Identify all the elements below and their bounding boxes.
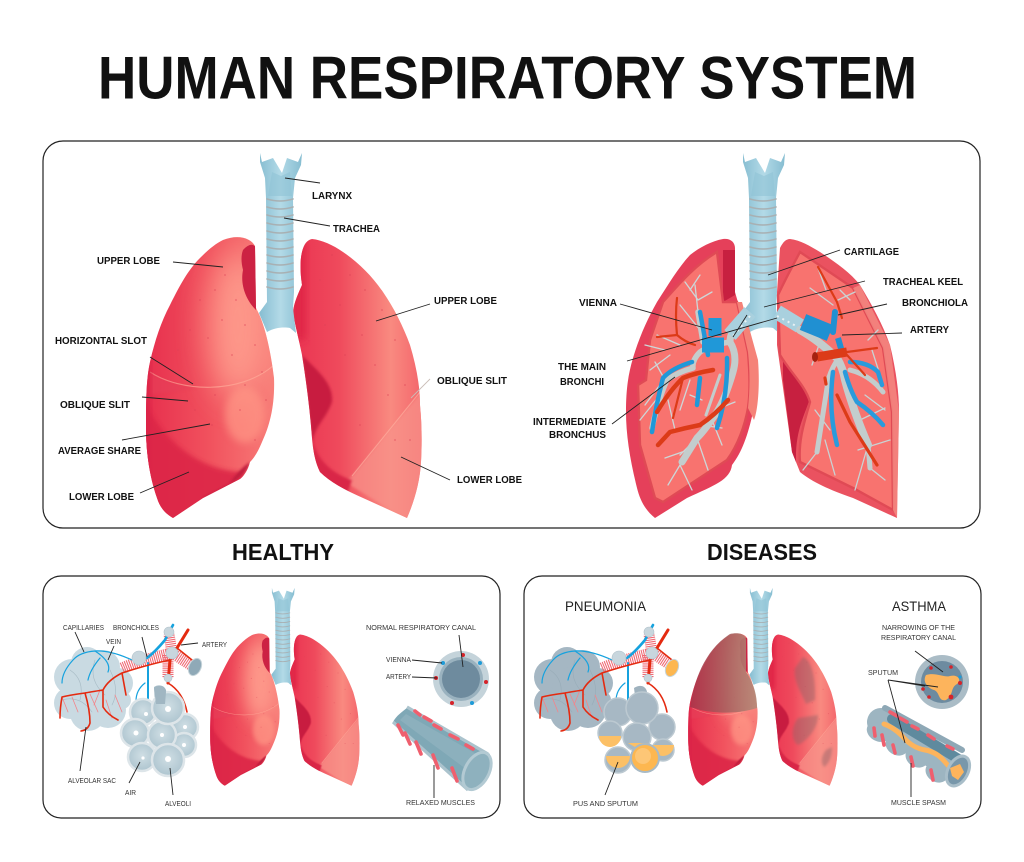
labels: diseases xyxy=(573,623,956,808)
labels: cross-section: INTERMEDIATE xyxy=(533,416,606,428)
labels: healthy: ARTERY xyxy=(386,672,411,681)
labels: healthy: ARTERY xyxy=(202,640,227,649)
labels: cross-section: TRACHEAL KEEL xyxy=(883,276,964,288)
labels: diseases: NARROWING OF THE xyxy=(882,623,955,632)
labels: healthy: BRONCHIOLES xyxy=(113,623,159,632)
labels: cross-section: BRONCHUS xyxy=(549,429,606,441)
infected upper lobe xyxy=(690,633,757,713)
labels: external lungs: OBLIQUE SLIT xyxy=(60,399,131,411)
labels: cross-section: THE MAIN xyxy=(558,361,606,373)
labels: external lungs: LARYNX xyxy=(312,190,352,202)
illustration: asthma airway section xyxy=(915,655,969,709)
labels: diseases: MUSCLE SPASM xyxy=(891,798,946,807)
illustration: asthma airway tube xyxy=(863,708,974,790)
labels: external lungs: LOWER LOBE xyxy=(457,474,522,486)
labels: external lungs: OBLIQUE SLIT xyxy=(437,375,508,387)
main bronchi xyxy=(730,267,890,490)
labels: external lungs: AVERAGE SHARE xyxy=(58,445,141,457)
labels: external lungs: HORIZONTAL SLOT xyxy=(55,335,148,347)
labels: external lungs xyxy=(55,178,522,503)
illustration: alveoli with pus xyxy=(598,657,681,773)
subheading: asthma: ASTHMA xyxy=(892,598,947,614)
labels: external lungs: TRACHEA xyxy=(333,223,380,235)
labels: healthy: VEIN xyxy=(106,637,121,646)
labels: cross-section: BRONCHIOLA xyxy=(902,297,968,309)
panel: diseases xyxy=(524,576,981,818)
bronchial tree: left xyxy=(640,275,742,490)
labels: diseases: RESPIRATORY CANAL xyxy=(881,633,956,642)
labels: healthy: AIR xyxy=(125,788,137,797)
illustration: alveoli cluster xyxy=(121,656,204,776)
labels: cross-section: CARTILAGE xyxy=(844,246,899,258)
illustration: capillaries and alveolar sac xyxy=(54,625,195,731)
title: HUMAN RESPIRATORY SYSTEM xyxy=(98,44,917,112)
illustration: pneumonia lungs xyxy=(685,588,842,790)
labels: healthy: ALVEOLI xyxy=(165,799,191,808)
labels: cross-section: ARTERY xyxy=(910,324,949,336)
labels: healthy xyxy=(63,623,476,808)
labels: cross-section xyxy=(533,246,968,441)
illustration: normal airway section xyxy=(433,651,489,707)
labels: healthy: ALVEOLAR SAC xyxy=(68,776,116,785)
illustration: infected capillaries and sac xyxy=(534,625,675,731)
labels: external lungs: LOWER LOBE xyxy=(69,491,134,503)
labels: healthy: RELAXED MUSCLES xyxy=(406,798,475,807)
heading: diseases: DISEASES xyxy=(707,539,817,565)
heading: healthy: HEALTHY xyxy=(232,539,334,565)
labels: diseases: SPUTUM xyxy=(868,668,898,677)
illustration: relaxed airway tube xyxy=(393,707,497,794)
labels: diseases: PUS AND SPUTUM xyxy=(573,799,638,808)
illustration: healthy lungs xyxy=(207,588,364,790)
lung patches xyxy=(793,657,832,767)
labels: healthy: CAPILLARIES xyxy=(63,623,104,632)
panel: lung anatomy xyxy=(43,141,980,528)
labels: cross-section: BRONCHI xyxy=(560,376,604,388)
labels: healthy: NORMAL RESPIRATORY CANAL xyxy=(366,623,476,632)
illustration: external lungs and trachea xyxy=(140,153,430,525)
labels: external lungs: UPPER LOBE xyxy=(97,255,160,267)
illustration: lung cross-section xyxy=(626,153,899,518)
panel: healthy xyxy=(43,576,500,818)
subheading: pneumonia: PNEUMONIA xyxy=(565,598,647,614)
labels: cross-section: VIENNA xyxy=(579,297,617,309)
labels: healthy: VIENNA xyxy=(386,655,411,664)
labels: external lungs: UPPER LOBE xyxy=(434,295,497,307)
